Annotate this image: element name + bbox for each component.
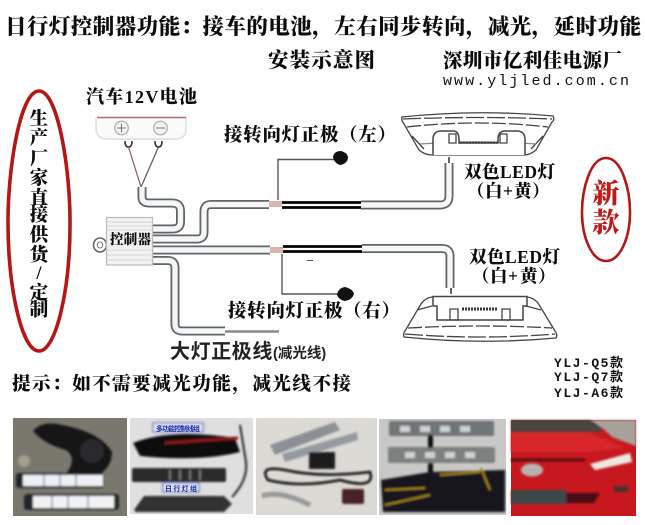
icon: left turn signal connector xyxy=(333,151,348,165)
photo 1: lit LED bars xyxy=(13,418,127,516)
icon: lower LED lamp xyxy=(404,296,557,341)
photo 4: two bars and wiring xyxy=(379,419,506,515)
callout: factory direct oval: 供 xyxy=(30,224,50,246)
icon: right turn signal connector xyxy=(337,287,354,301)
model list: YLJ-Q7款 xyxy=(554,369,623,385)
callout: factory direct oval: / xyxy=(35,264,42,284)
label: lower two-colour LED: （白+黄） xyxy=(472,266,556,286)
callout: factory direct oval: 直 xyxy=(30,187,49,209)
callout: factory direct oval: 定 xyxy=(30,282,49,304)
callout: factory direct oval xyxy=(8,91,70,351)
manufacturer name: 深圳市亿利佳电源厂 xyxy=(443,49,622,72)
website: www.yljled.com.cn xyxy=(443,73,629,90)
wiring harness xyxy=(142,157,451,332)
callout: factory direct oval: 产 xyxy=(30,127,48,149)
callout: factory direct oval: 家 xyxy=(30,167,48,189)
photo 3: kit contents xyxy=(256,418,377,515)
model list: YLJ-A6款 xyxy=(554,385,623,401)
heading: installation diagram: 安装示意图 xyxy=(268,48,375,72)
callout: factory direct oval: 生 xyxy=(30,109,48,130)
controller box xyxy=(94,218,152,265)
callout: factory direct oval: 厂 xyxy=(30,149,48,170)
label: headlight positive wire: 大灯正极线(减光线) xyxy=(170,340,326,363)
photo 2 caption: harness: 多功能控制线组 xyxy=(156,424,200,433)
icon: car battery xyxy=(96,118,186,187)
callout: factory direct oval: 制 xyxy=(30,300,48,321)
callout: new model oval xyxy=(582,158,630,261)
label: right turn signal positive: 接转向灯正极（右） xyxy=(228,300,400,322)
callout: new model oval: 款 xyxy=(592,207,620,238)
label: upper two-colour LED: （白+黄） xyxy=(467,181,550,201)
title: 日行灯控制器功能：接车的电池，左右同步转向，减光，延时功能 xyxy=(5,14,641,40)
label: lower two-colour LED: 双色LED灯 xyxy=(469,247,560,267)
controller box: 控制器 xyxy=(110,231,152,247)
icon: upper LED lamp xyxy=(402,113,554,155)
photo 5: red car xyxy=(511,420,636,516)
photo 2 caption: daytime light: 日行灯组 xyxy=(165,484,197,493)
label: left turn signal positive: 接转向灯正极（左） xyxy=(224,124,396,146)
photo 2: harness and bars xyxy=(130,418,253,514)
callout: factory direct oval: 接 xyxy=(30,204,50,226)
tip: 提示：如不需要减光功能，减光线不接 xyxy=(12,373,352,395)
battery label: 汽车12V电池 xyxy=(86,86,197,107)
callout: factory direct oval: 货 xyxy=(30,244,51,266)
model list: YLJ-Q5款 xyxy=(554,355,623,371)
label: upper two-colour LED: 双色LED灯 xyxy=(464,162,556,182)
callout: new model oval: 新 xyxy=(592,179,620,209)
